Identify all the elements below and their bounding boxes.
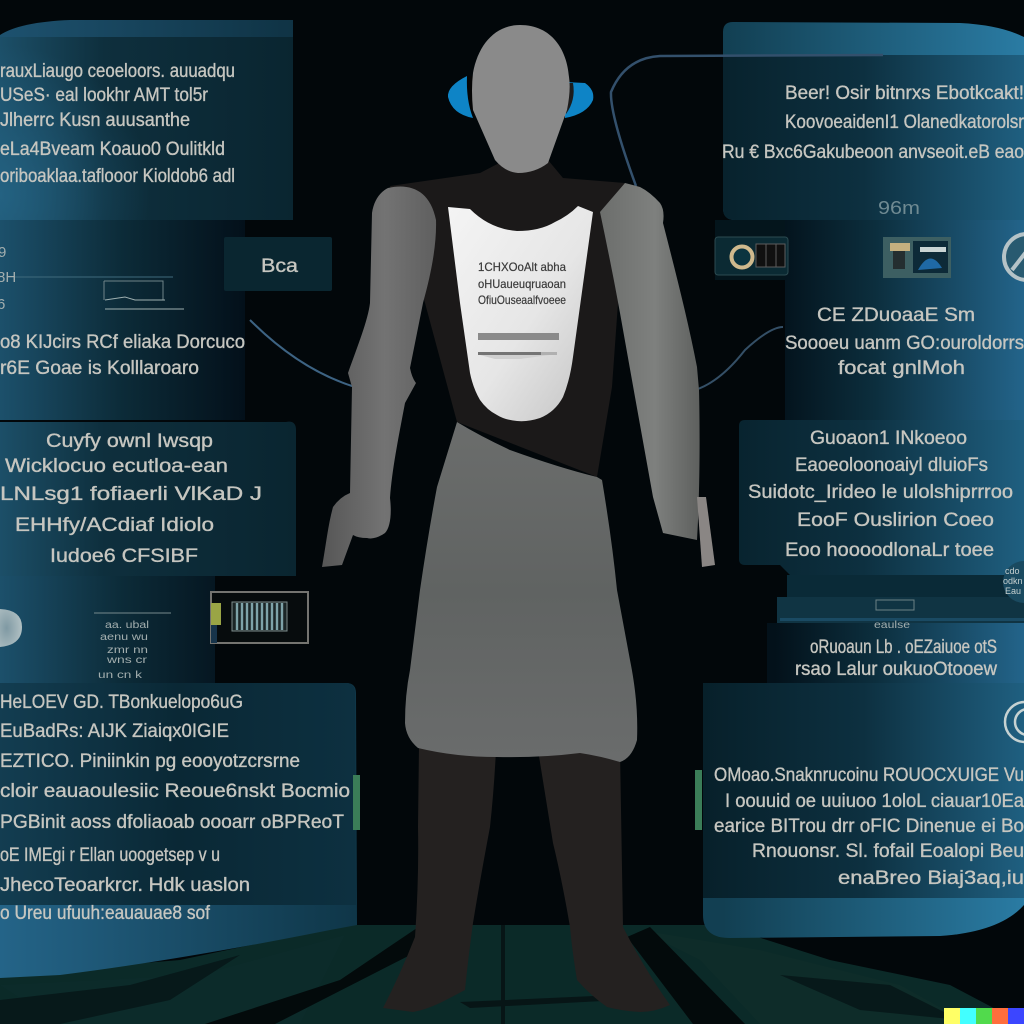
connector: top right curve <box>611 55 883 186</box>
right wrist strip <box>697 497 715 567</box>
panel: right bottom <box>695 683 1024 938</box>
panel: left top <box>0 20 293 220</box>
left bottom text: JhecoTeoarkrcr. Hdk uaslon <box>0 875 250 896</box>
panel: right fourth <box>767 561 1024 706</box>
tag box: Bca <box>261 256 298 277</box>
mini text list: wns cr <box>106 655 148 666</box>
right second text: focat gnlMoh <box>838 358 965 379</box>
panel: right third <box>739 420 1024 575</box>
left top text: USeS· eal lookhr AMT tol5r <box>0 85 209 106</box>
torso <box>390 160 625 477</box>
right third text: EooF Ouslirion Coeo <box>797 510 994 531</box>
icon: round seal: Eau <box>1005 586 1021 596</box>
left bottom text: PGBinit aoss dfoliaoab oooarr oBPReoT <box>0 812 344 833</box>
legs <box>383 745 670 1012</box>
left top inner block <box>0 37 293 220</box>
mini text list <box>94 613 171 681</box>
left third text <box>0 431 262 567</box>
left bottom text: o Ureu ufuuh:eauauae8 sof <box>0 903 211 924</box>
icon: ring card <box>715 237 788 275</box>
right fourth text: rsao Lalur oukuoOtooew <box>795 659 997 680</box>
mini text list: un cn k <box>98 670 143 681</box>
right top text: 96m <box>878 198 920 218</box>
bib text: oHUaueuqruaoan <box>478 277 566 291</box>
right fourth text <box>795 637 997 706</box>
side glyphs <box>0 244 16 313</box>
right third text: Eaoeoloonoaiyl dluioFs <box>795 455 988 476</box>
left top text: rauxLiaugo ceoeloors. auuadqu <box>0 61 235 82</box>
left third text: Iudoe6 CFSIBF <box>50 546 198 567</box>
left third text: Cuyfy ownl Iwsqp <box>46 431 213 452</box>
bib text: OfiuOuseaalfvoeee <box>478 293 566 307</box>
panel: left third <box>0 422 296 576</box>
panel: right top <box>722 22 1024 220</box>
figure <box>322 25 715 1012</box>
icon: round seal <box>1003 561 1024 603</box>
panel: right second <box>715 220 1024 420</box>
left bottom text: EuBadRs: AIJK Ziaiqx0IGIE <box>0 721 229 742</box>
right second text <box>785 305 1024 379</box>
left bottom text: EZTICO. Piniinkin pg eooyotzcrsrne <box>0 751 300 772</box>
right third text: Suidotc_Irideo le ulolshiprrroo <box>748 482 1013 503</box>
right bottom text: earice BITrou drr oFIC Dinenue ei Bo <box>714 816 1024 837</box>
left top text <box>0 61 235 187</box>
mini text list: zmr nn <box>107 645 148 656</box>
mini text list: aenu wu <box>100 632 148 643</box>
left second text: r6E Goae is Kolllaroaro <box>0 358 199 379</box>
left bottom text: oE IMEgi r Ellan uoogetsep v u <box>0 845 220 866</box>
icon: window card <box>883 237 951 278</box>
right top text <box>722 83 1024 218</box>
right bottom text: enaBreo Biaj3aq,iu <box>838 868 1024 889</box>
left second text <box>0 332 245 379</box>
icon: round gauge <box>1004 234 1024 280</box>
icon: headphones <box>448 76 593 118</box>
left bottom text: cloir eauaoulesiic Reoue6nskt Bocmio <box>0 781 350 802</box>
skirt <box>405 422 637 762</box>
connector: left arm <box>250 320 355 387</box>
green edge bar <box>695 770 702 830</box>
right third text: Guoaon1 INkoeoo <box>810 428 967 449</box>
left bottom text <box>0 692 350 924</box>
chest bib <box>448 206 593 421</box>
panel: left bottom <box>0 683 360 978</box>
panel: left fourth <box>0 576 215 683</box>
connector: right arm <box>695 327 783 390</box>
right arm <box>600 183 715 567</box>
colour strip logo <box>944 1008 1024 1024</box>
bib text: 1CHXOoAlt abha <box>478 260 566 274</box>
green edge bar <box>353 775 360 830</box>
mini text stack <box>874 600 914 631</box>
mini text list: aa. ubal <box>105 620 149 631</box>
left third text: EHHfy/ACdiaf Idiolo <box>15 515 214 536</box>
right second text: CE ZDuoaaE Sm <box>817 305 975 326</box>
left top text: Jlherrc Kusn auusanthe <box>0 110 190 131</box>
right third text <box>748 428 1013 561</box>
icon: sphere <box>0 609 22 647</box>
tag box <box>224 237 332 291</box>
left second text: o8 KIJcirs RCf eliaka Dorcuco <box>0 332 245 353</box>
right third text: Eoo hoooodlonaLr toee <box>785 540 994 561</box>
right bottom text <box>714 765 1024 889</box>
head <box>472 25 570 173</box>
right top inner block <box>723 55 1024 220</box>
bib bars <box>478 333 559 359</box>
left top text: eLa4Bveam Koauo0 Oulitkld <box>0 139 225 160</box>
left arm <box>322 187 436 567</box>
right fourth text: Sonpe meEDIBODelle <box>805 685 975 706</box>
icon: round seal: odkn <box>1003 576 1023 586</box>
right bottom text: Rnouonsr. Sl. fofail Eoalopi Beu <box>752 841 1024 862</box>
bib text <box>478 260 566 307</box>
mini chart <box>8 277 184 309</box>
icon: round seal: cdo <box>1005 566 1020 576</box>
left top text: oriboaklaa.taflooor Kioldob6 adl <box>0 166 235 187</box>
panel: left second <box>0 220 245 420</box>
icon: spiral ring <box>1005 702 1024 742</box>
right top text: Beer! Osir bitnrxs Ebotkcakt! <box>785 83 1024 104</box>
icon: barcode card <box>211 592 308 643</box>
floor <box>0 925 1024 1024</box>
right second text: Soooeu uanm GO:ouroldorrs <box>785 333 1024 354</box>
mini text stack: eaulse <box>874 620 911 631</box>
left third text: Wicklocuo ecutloa-ean <box>5 456 228 477</box>
left bottom text: HeLOEV GD. TBonkuelopo6uG <box>0 692 243 713</box>
left third text: LNLsg1 fofiaerli VlKaD J <box>0 484 262 505</box>
